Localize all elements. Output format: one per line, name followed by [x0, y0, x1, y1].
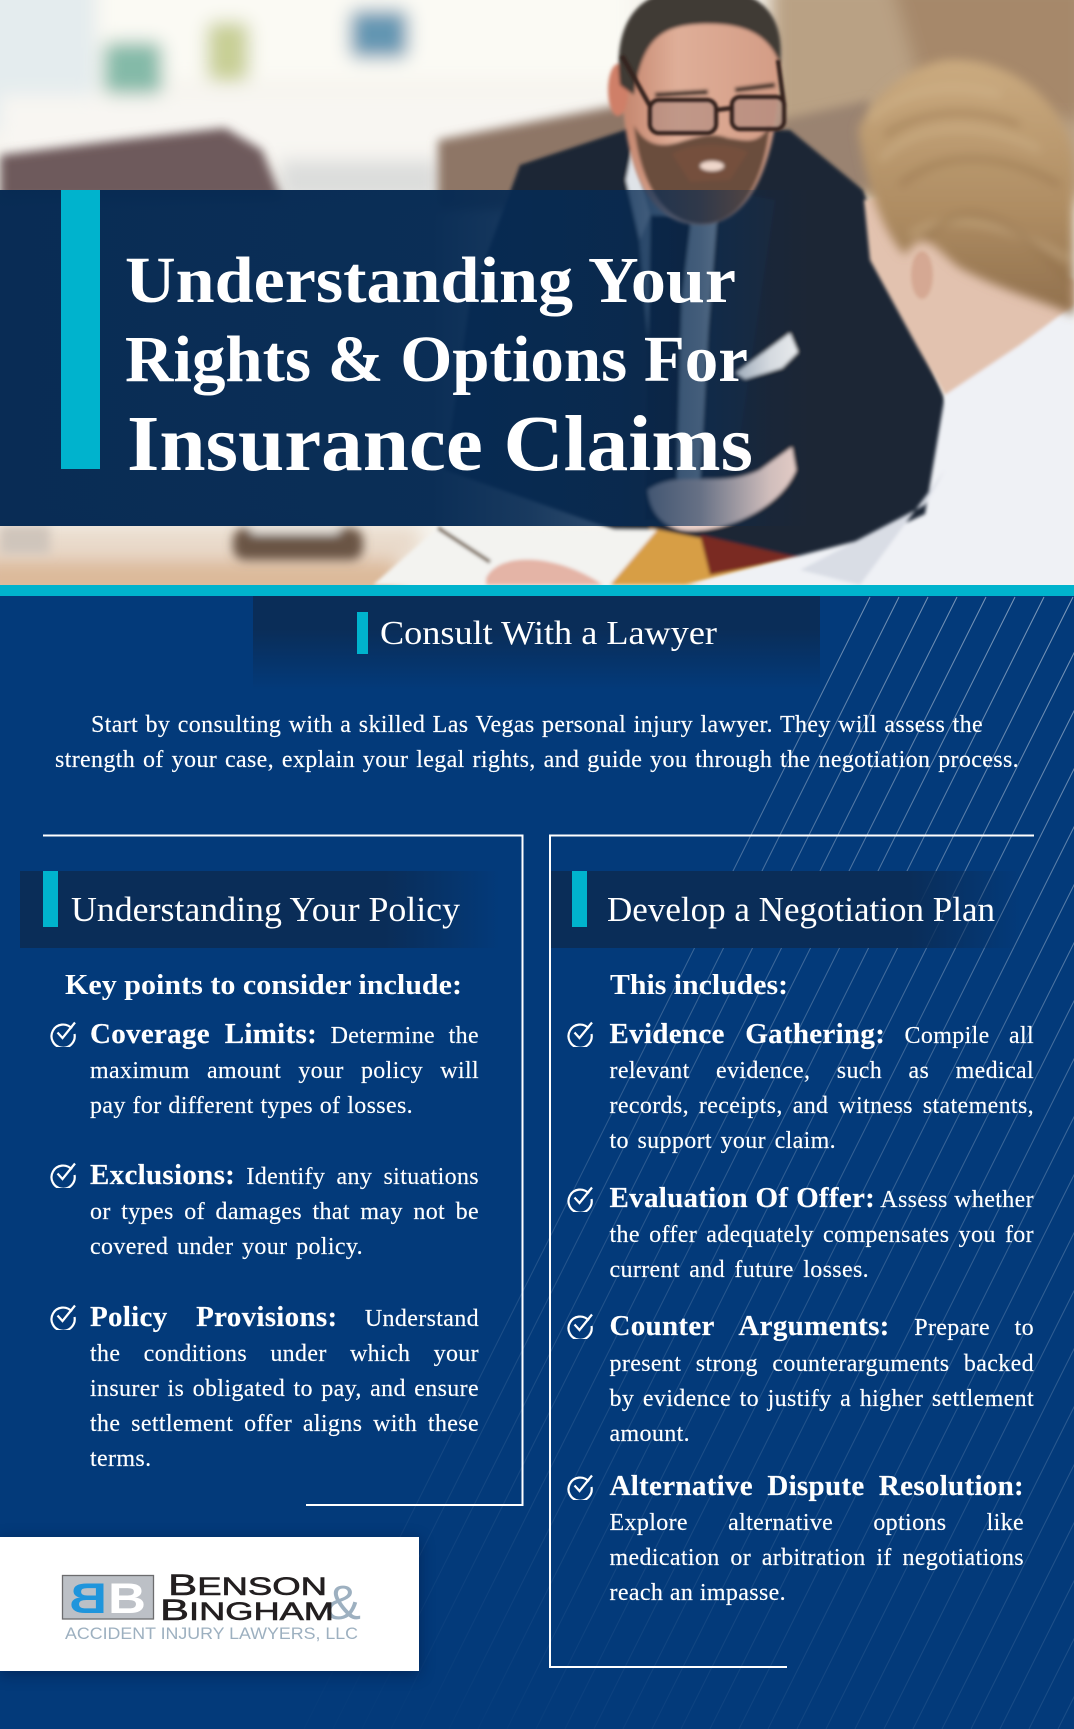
- list item: coverage limits: maximum amount your policy will: [90, 1058, 479, 1084]
- list item: evidence gathering: records, receipts, and witness statements,: [610, 1093, 1034, 1119]
- subheading: key points: Key points to consider include:: [65, 970, 462, 1001]
- logo: benson and bingham: [62, 1569, 361, 1643]
- left column list: [50, 1018, 479, 1472]
- list item: policy provisions: [50, 1301, 479, 1472]
- list item: evidence gathering: relevant evidence, such as medical: [610, 1058, 1034, 1084]
- icon: check circle: [567, 1314, 593, 1339]
- logo: benson and bingham: B: [108, 1575, 146, 1623]
- panel: develop a negotiation plan frame: [549, 834, 1034, 1668]
- logo card: [0, 1537, 419, 1671]
- teal marker: [43, 871, 58, 927]
- teal marker: [357, 612, 368, 654]
- list item: evidence gathering: to support your claim.: [610, 1128, 836, 1154]
- logo: benson and bingham: ACCIDENT INJURY LAWYERS, LLC: [65, 1624, 358, 1643]
- icon: check circle: [567, 1186, 593, 1212]
- icon: check circle: [50, 1304, 76, 1330]
- list item: counter arguments: present strong counterarguments backed: [610, 1350, 1034, 1376]
- list item: counter arguments: by evidence to justify a higher settlement: [610, 1386, 1034, 1412]
- list item: counter arguments: Counter Arguments: Prepare to: [610, 1310, 1034, 1342]
- list item: policy provisions: the conditions under which your: [90, 1341, 479, 1367]
- list item: alternative dispute resolution: medication or arbitration if negotiations: [610, 1545, 1024, 1571]
- heading: develop a negotiation plan: [551, 871, 1021, 948]
- header overlay band: [0, 190, 810, 526]
- title: Rights & Options For: [125, 323, 748, 396]
- title: Insurance Claims: [127, 401, 753, 488]
- list item: exclusions: [50, 1159, 479, 1260]
- intro paragraph: Start by consulting with a skilled Las Vegas personal injury lawyer. They will assess the: [91, 712, 983, 738]
- section heading: consult with a lawyer: [253, 596, 820, 690]
- title: [125, 244, 753, 488]
- logo: benson and bingham: &: [325, 1577, 361, 1630]
- woman: [685, 190, 1074, 585]
- list item: coverage limits: pay for different types of losses.: [90, 1093, 413, 1119]
- list item: counter arguments: amount.: [610, 1421, 690, 1447]
- suit: [373, 125, 959, 585]
- list item: coverage limits: [50, 1018, 479, 1119]
- glasses: [622, 56, 784, 133]
- icon: check circle: [50, 1162, 76, 1188]
- list item: policy provisions: Policy Provisions: Understand: [90, 1301, 479, 1333]
- list item: exclusions: Exclusions: Identify any situations: [90, 1159, 479, 1191]
- list item: evidence gathering: [567, 1018, 1034, 1154]
- list item: evaluation of offer: current and future losses.: [610, 1257, 869, 1283]
- teal accent bar: [61, 190, 100, 469]
- list item: alternative dispute resolution: Alternative Dispute Resolution:: [610, 1470, 1024, 1502]
- heading: understanding your policy: [20, 871, 500, 948]
- logo: benson and bingham: B INGHAM: [160, 1594, 334, 1627]
- list item: exclusions: covered under your policy.: [90, 1234, 363, 1260]
- list item: alternative dispute resolution: Explore alternative options like: [610, 1510, 1024, 1536]
- icon: check circle: [567, 1022, 593, 1047]
- teal marker: [572, 871, 587, 927]
- list item: evaluation of offer: [567, 1182, 1034, 1283]
- panel: understanding your policy frame: [43, 834, 524, 1506]
- intro paragraph: strength of your case, explain your legal rights, and guide you through the negotiation process.: [55, 747, 1019, 773]
- teal divider band: [0, 585, 1074, 596]
- face: [608, 0, 781, 225]
- list item: alternative dispute resolution: [567, 1470, 1024, 1606]
- logo: benson and bingham: B: [69, 1575, 107, 1623]
- list item: counter arguments: [567, 1310, 1034, 1447]
- header photo: lawyer talking with client: [0, 0, 1074, 585]
- icon: check circle: [567, 1474, 593, 1500]
- heading text: Consult With a Lawyer: [380, 615, 718, 652]
- list item: evaluation of offer: the offer adequately compensates you for: [610, 1222, 1034, 1248]
- list item: policy provisions: terms.: [90, 1446, 151, 1472]
- intro paragraph: [55, 712, 1019, 773]
- icon: check circle: [50, 1022, 76, 1047]
- list item: evaluation of offer: Evaluation Of Offer: Assess whether: [610, 1182, 1034, 1214]
- title: Understanding Your: [125, 244, 736, 317]
- list item: exclusions: or types of damages that may not be: [90, 1199, 479, 1225]
- heading text: Understanding Your Policy: [71, 890, 461, 929]
- list item: alternative dispute resolution: reach an impasse.: [610, 1580, 786, 1606]
- list item: coverage limits: Coverage Limits: Determine the: [90, 1018, 479, 1050]
- list item: evidence gathering: Evidence Gathering: Compile all: [610, 1018, 1034, 1050]
- subheading: this includes: This includes:: [610, 970, 788, 1001]
- logo: benson and bingham: B ENSON: [168, 1569, 327, 1602]
- list item: policy provisions: insurer is obligated to pay, and ensure: [90, 1376, 479, 1402]
- list item: policy provisions: the settlement offer aligns with these: [90, 1411, 479, 1437]
- heading text: Develop a Negotiation Plan: [607, 890, 995, 929]
